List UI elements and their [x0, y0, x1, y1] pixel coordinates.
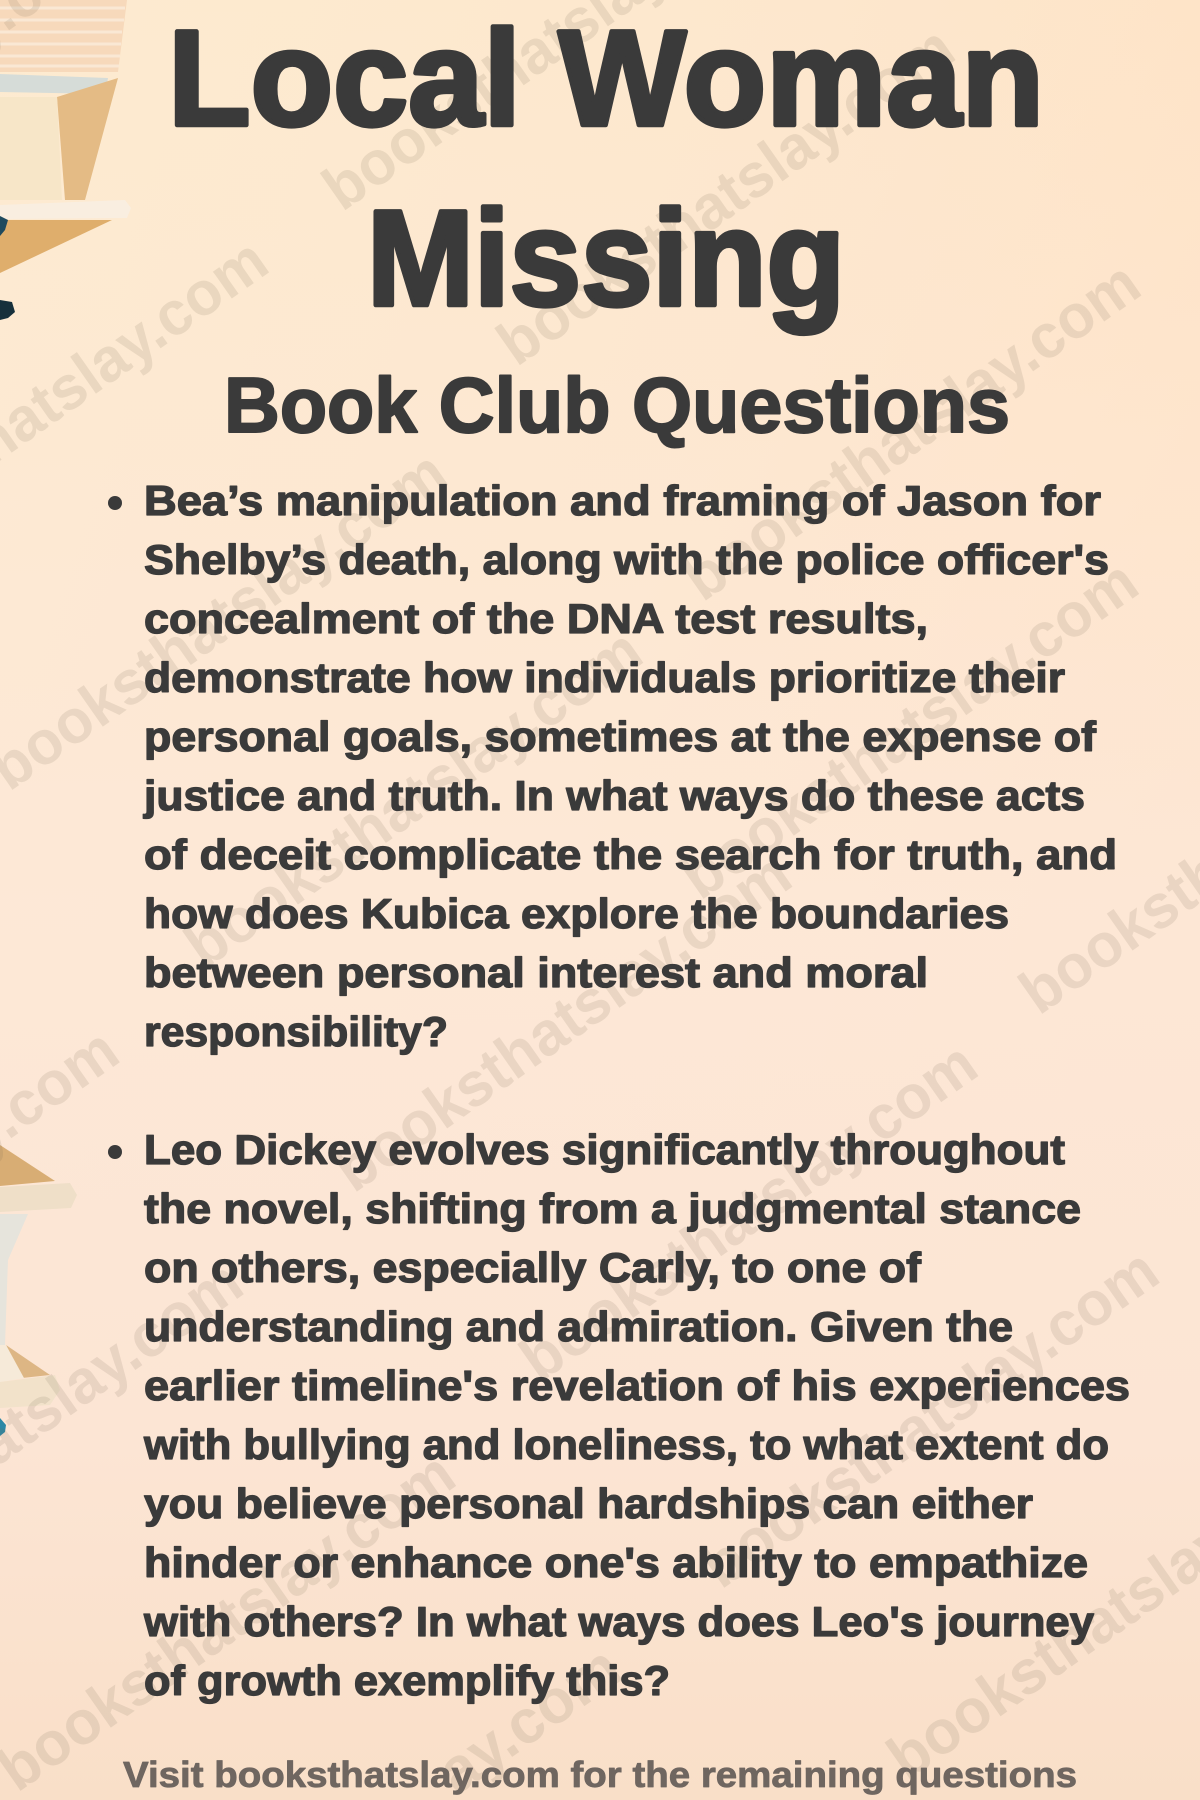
- illustration: top-left book stack: [0, 0, 131, 320]
- watermark: booksthatslay.com repeated: booksthatslay.com: [689, 1235, 1171, 1601]
- question 1: between personal interest and moral: [144, 949, 928, 996]
- question 2: Leo Dickey evolves significantly throughout: [144, 1126, 1065, 1173]
- watermark: booksthatslay.com repeated: booksthatslay.com: [671, 248, 1153, 614]
- question 2: understanding and admiration. Given the: [144, 1303, 1013, 1350]
- watermark: booksthatslay.com repeated: booksthatslay.com: [485, 13, 967, 379]
- title: Local Woman: [168, 2, 1044, 154]
- question 2: you believe personal hardships can either: [144, 1480, 1033, 1527]
- watermark: booksthatslay.com repeated: booksthatslay.com: [322, 839, 804, 1205]
- watermark: booksthatslay.com repeated: booksthatslay.com: [173, 616, 654, 982]
- question 1: Shelby’s death, along with the police officer's: [144, 536, 1109, 583]
- title: [168, 2, 1044, 334]
- question 2: hinder or enhance one's ability to empathize: [144, 1539, 1088, 1586]
- footer note: Visit booksthatslay.com for the remaining questions: [123, 1754, 1077, 1795]
- question 2: of growth exemplify this?: [144, 1657, 670, 1704]
- question 2: the novel, shifting from a judgmental stance: [144, 1185, 1081, 1232]
- watermark: booksthatslay.com repeated: booksthatslay.com: [669, 547, 1150, 913]
- question 1: of deceit complicate the search for truth, and: [144, 831, 1117, 878]
- question 1: Bea’s manipulation and framing of Jason for: [144, 477, 1101, 524]
- watermark: booksthatslay.com repeated: booksthatslay.com: [508, 1029, 990, 1395]
- question 2: with others? In what ways does Leo's journey: [143, 1598, 1094, 1645]
- question 1: [108, 477, 1117, 1055]
- question 1: personal goals, sometimes at the expense of: [144, 713, 1096, 760]
- question 1: how does Kubica explore the boundaries: [144, 890, 1009, 937]
- question 1: responsibility?: [144, 1008, 448, 1055]
- title: Missing: [367, 182, 845, 334]
- question 1: demonstrate how individuals prioritize their: [144, 654, 1065, 701]
- question 2: [108, 1126, 1130, 1704]
- subtitle: Book Club Questions: [224, 361, 1010, 449]
- question 1: justice and truth. In what ways do these acts: [143, 772, 1085, 819]
- illustration: lower-left book stack: [0, 1145, 77, 1436]
- question 2: with bullying and loneliness, to what extent do: [143, 1421, 1109, 1468]
- question 1: concealment of the DNA test results,: [144, 595, 928, 642]
- question 2: earlier timeline's revelation of his experiences: [144, 1362, 1130, 1409]
- question 2: on others, especially Carly, to one of: [144, 1244, 921, 1291]
